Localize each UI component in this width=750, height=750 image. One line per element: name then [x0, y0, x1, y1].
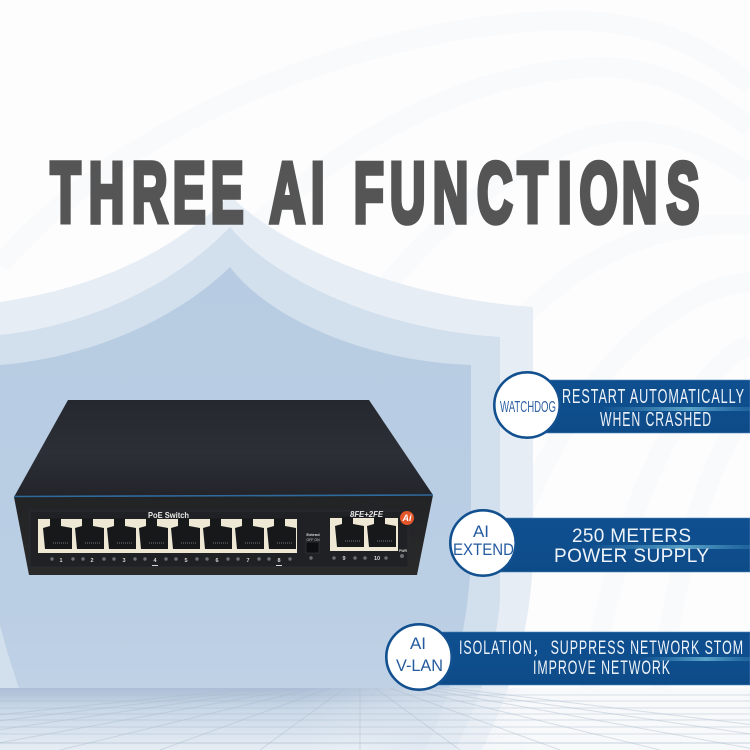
badge: WATCHDOG [500, 399, 556, 416]
shield backdrop [0, 195, 533, 750]
tiled floor [0, 688, 750, 750]
badge [494, 372, 560, 438]
badge: AI [473, 522, 489, 541]
banner text [562, 386, 745, 431]
port numbers: 5 [184, 558, 188, 564]
status LEDs [50, 554, 404, 561]
extend switch: OFF ON [306, 538, 320, 542]
feature 1: watchdog [494, 372, 750, 438]
badge: V-LAN [396, 656, 443, 675]
port markers [152, 564, 282, 566]
banner text [554, 526, 709, 567]
switch front face [14, 495, 433, 575]
port numbers: 2 [90, 558, 94, 564]
port numbers [59, 556, 380, 564]
extend switch [306, 532, 320, 553]
power label: PWR [399, 549, 408, 553]
banner text [459, 637, 744, 679]
icon: AI badge: Ai [402, 513, 412, 523]
banner [495, 518, 750, 572]
shield middle layer [0, 227, 500, 750]
port numbers: 6 [215, 558, 219, 564]
eight PoE ports [38, 518, 297, 553]
PoE switch product [14, 400, 433, 575]
port numbers: 4 [153, 558, 157, 564]
banner [540, 380, 750, 433]
badge [386, 624, 452, 690]
banner text: POWER SUPPLY [554, 546, 709, 567]
icon: AI badge [400, 511, 414, 525]
PoE Switch label: PoE Switch [148, 511, 189, 520]
port recess [30, 511, 408, 567]
badge: AI [410, 634, 426, 653]
port numbers: 8 [277, 558, 281, 564]
badge: EXTEND [453, 540, 514, 559]
port numbers: 1 [59, 558, 63, 564]
title: THREE AI FUNCTIONS [51, 145, 699, 240]
extend switch: Extend [306, 532, 320, 537]
banner text: IMPROVE NETWORK [533, 657, 671, 679]
infographic canvas [0, 160, 750, 750]
uplink label: 8FE+2FE [350, 510, 384, 519]
banner [430, 632, 750, 685]
feature 3: AI V-LAN [386, 624, 750, 690]
port numbers: 10 [374, 556, 380, 562]
badge [450, 510, 516, 576]
banner text: 250 METERS [572, 526, 691, 547]
port numbers: 7 [246, 558, 250, 564]
feature 2: AI extend [450, 510, 750, 576]
port numbers: 9 [342, 556, 346, 562]
shield inner layer [0, 267, 471, 750]
shield outer layer [0, 195, 533, 750]
port numbers: 3 [122, 558, 126, 564]
two uplink ports [330, 516, 398, 551]
switch top face [14, 400, 433, 497]
